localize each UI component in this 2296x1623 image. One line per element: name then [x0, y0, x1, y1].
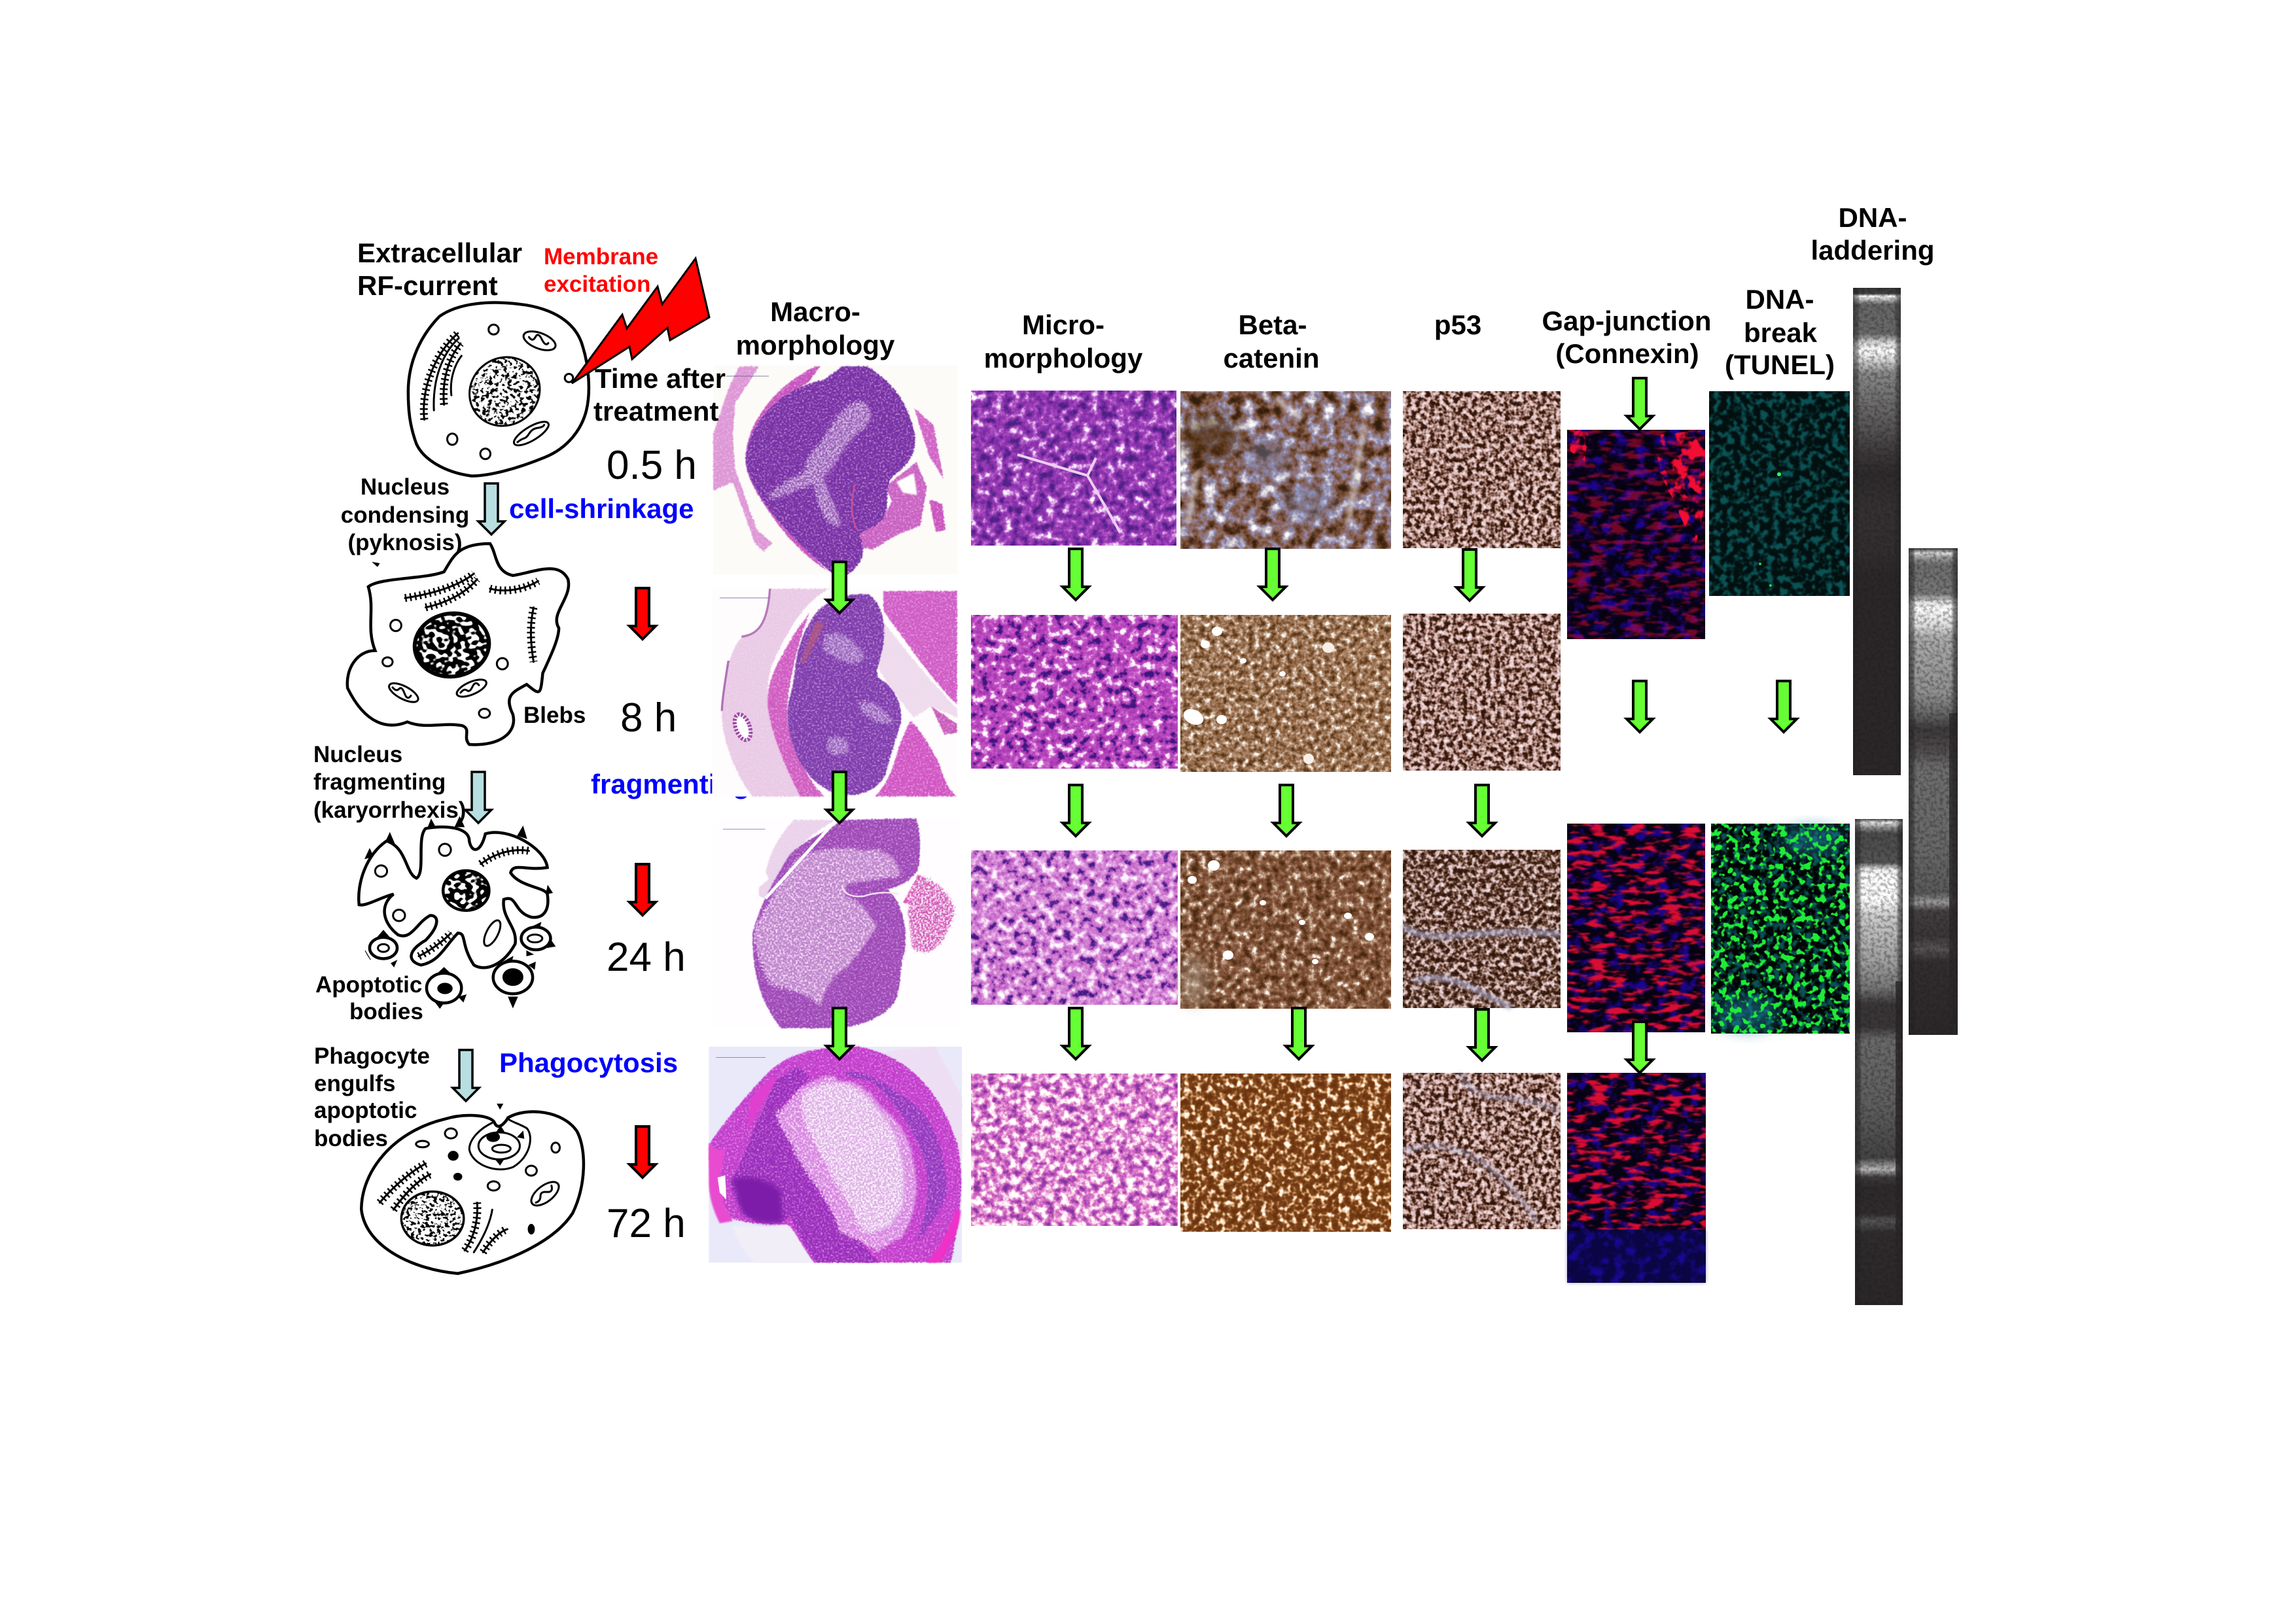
arrow: blue step 2 — [465, 772, 491, 823]
panel: connexin 0.5 h — [1567, 430, 1705, 639]
label: Time after treatment: Time after — [595, 363, 726, 394]
label: nucleus condensing (pyknosis) — [341, 474, 469, 555]
label: nucleus condensing (pyknosis): condensing — [341, 502, 469, 528]
panel: macro-morphology 24 h — [713, 818, 961, 1028]
panel: connexin 72 h — [1567, 1073, 1706, 1283]
panel: TUNEL 0.5 h — [1709, 391, 1850, 596]
diagram: phagocyte engulfing apoptotic body — [361, 1104, 584, 1274]
heading: p53: p53 — [1434, 309, 1481, 340]
arrow: green p53 24h — [1469, 1009, 1495, 1060]
diagram: normal cell — [408, 303, 589, 476]
panel: macro-morphology 8 h — [712, 588, 957, 797]
panel: TUNEL 24 h — [1711, 824, 1850, 1034]
heading: Macro-morphology: Macro- — [770, 296, 860, 327]
arrow: green beta 8h — [1273, 785, 1299, 836]
heading: Beta-catenin — [1223, 309, 1320, 374]
panel: p53 8 h — [1403, 614, 1561, 771]
heading: DNA-laddering: DNA- — [1839, 202, 1907, 233]
panel: DNA gel lane 3 — [1855, 819, 1903, 1305]
arrow: green p53 0.5h — [1457, 550, 1483, 601]
panel: beta-catenin 24 h — [1180, 850, 1391, 1009]
arrow: green macro 24h — [826, 1008, 853, 1059]
panel: micro-morphology 8 h — [971, 615, 1178, 769]
arrow: green beta 24h — [1286, 1008, 1312, 1059]
heading: Beta-catenin: catenin — [1223, 343, 1320, 374]
heading: Macro-morphology: morphology — [736, 330, 895, 360]
label: phagocyte engulfs apoptotic bodies: Phagocyte — [314, 1043, 430, 1069]
heading: DNA-laddering — [1810, 202, 1935, 266]
arrow: red 8h to 24h — [629, 864, 656, 915]
label: Time after treatment: treatment — [593, 396, 718, 427]
panel: beta-catenin 0.5 h — [1180, 391, 1391, 549]
label: membrane excitation: excitation — [544, 271, 650, 297]
heading: Extracellular RF-current: RF-current — [357, 270, 498, 301]
label: nucleus fragmenting (karyorrhexis): fragmenting — [313, 769, 446, 795]
label: membrane excitation — [544, 244, 658, 297]
label: cell-shrinkage: cell-shrinkage — [509, 493, 694, 524]
arrow: green macro 8h — [826, 772, 853, 823]
arrow: green micro 24h — [1063, 1008, 1089, 1059]
arrow: green connexin top — [1627, 378, 1653, 429]
label: apoptotic bodies — [315, 972, 423, 1024]
panel: micro-morphology 0.5 h — [971, 391, 1176, 546]
label: Time after treatment — [593, 363, 726, 427]
label: nucleus fragmenting (karyorrhexis): Nucleus — [313, 742, 402, 767]
row labels: time points: 72 h — [607, 1201, 686, 1246]
heading: Micro-morphology — [984, 309, 1143, 374]
label: phagocyte engulfs apoptotic bodies: engulfs — [314, 1071, 395, 1096]
diagram: shrunken cell with blebs — [347, 544, 569, 744]
heading: Extracellular RF-current — [357, 237, 522, 301]
panel: p53 0.5 h — [1403, 391, 1561, 548]
arrow: green micro 8h — [1063, 785, 1089, 836]
panel: DNA gel lane 1 — [1853, 288, 1901, 775]
arrow: blue step 1 — [478, 483, 504, 534]
label: apoptotic bodies: bodies — [349, 999, 423, 1024]
panel: beta-catenin 8 h — [1180, 615, 1391, 772]
arrow: green connexin middle — [1627, 681, 1653, 732]
label: phagocyte engulfs apoptotic bodies: bodies — [314, 1126, 388, 1151]
heading: Beta-catenin: Beta- — [1238, 309, 1307, 340]
heading: DNA-break (TUNEL): (TUNEL) — [1725, 349, 1835, 380]
row labels: time points: 8 h — [620, 695, 677, 741]
panel: p53 72 h — [1403, 1073, 1561, 1229]
heading: Micro-morphology: morphology — [984, 343, 1143, 374]
arrow: red 24h to 72h — [629, 1126, 656, 1178]
label: Blebs: Blebs — [523, 703, 586, 728]
row labels: time points — [607, 443, 697, 1246]
heading: DNA-break (TUNEL) — [1725, 284, 1835, 380]
label: Phagocytosis: Phagocytosis — [499, 1047, 678, 1078]
label: fragmenting: fragmenting — [591, 769, 750, 799]
arrow: red 0.5h to 8h — [629, 588, 656, 639]
heading: DNA-laddering: laddering — [1810, 235, 1935, 266]
arrow: green TUNEL — [1771, 681, 1797, 732]
heading: Gap-junction (Connexin) — [1542, 305, 1711, 369]
arrow: green macro 0.5h — [826, 562, 853, 613]
label: nucleus condensing (pyknosis): (pyknosis) — [347, 530, 463, 555]
label: membrane excitation: Membrane — [544, 244, 658, 270]
heading: Micro-morphology: Micro- — [1022, 309, 1104, 340]
label: nucleus fragmenting (karyorrhexis) — [313, 742, 466, 823]
panel: beta-catenin 72 h — [1180, 1073, 1391, 1232]
panel: macro-morphology 72 h — [709, 1047, 962, 1263]
arrow: green micro 0.5h — [1063, 549, 1089, 600]
label: phagocyte engulfs apoptotic bodies: apoptotic — [314, 1098, 417, 1123]
panel: micro-morphology 24 h — [971, 850, 1178, 1005]
panel: macro-morphology 0.5 h — [713, 365, 957, 574]
arrow: blue step 3 — [453, 1050, 479, 1101]
row labels: time points: 24 h — [607, 935, 686, 980]
panel: connexin 24 h — [1567, 824, 1705, 1032]
heading: Gap-junction (Connexin): Gap-junction — [1542, 305, 1711, 336]
icon: red lightning bolt — [572, 258, 709, 383]
heading: Gap-junction (Connexin): (Connexin) — [1555, 338, 1699, 369]
row labels: time points: 0.5 h — [607, 443, 697, 488]
heading: Macro-morphology — [736, 296, 895, 360]
arrow: green connexin bottom — [1627, 1022, 1653, 1073]
label: nucleus fragmenting (karyorrhexis): (karyorrhexis) — [313, 797, 466, 823]
panel: DNA gel lane 2 — [1909, 548, 1958, 1035]
heading: Extracellular RF-current: Extracellular — [357, 237, 522, 268]
label: nucleus condensing (pyknosis): Nucleus — [361, 474, 450, 500]
panel: micro-morphology 72 h — [971, 1073, 1178, 1226]
panel: p53 24 h — [1403, 850, 1561, 1008]
heading: DNA-break (TUNEL): DNA- — [1746, 284, 1814, 315]
label: phagocyte engulfs apoptotic bodies — [314, 1043, 430, 1151]
label: apoptotic bodies: Apoptotic — [315, 972, 422, 998]
arrow: green beta 0.5h — [1260, 549, 1286, 600]
heading: DNA-break (TUNEL): break — [1744, 317, 1818, 348]
diagram: fragmenting cell with apoptotic bodies — [359, 817, 555, 1008]
arrow: green p53 8h — [1469, 785, 1495, 836]
